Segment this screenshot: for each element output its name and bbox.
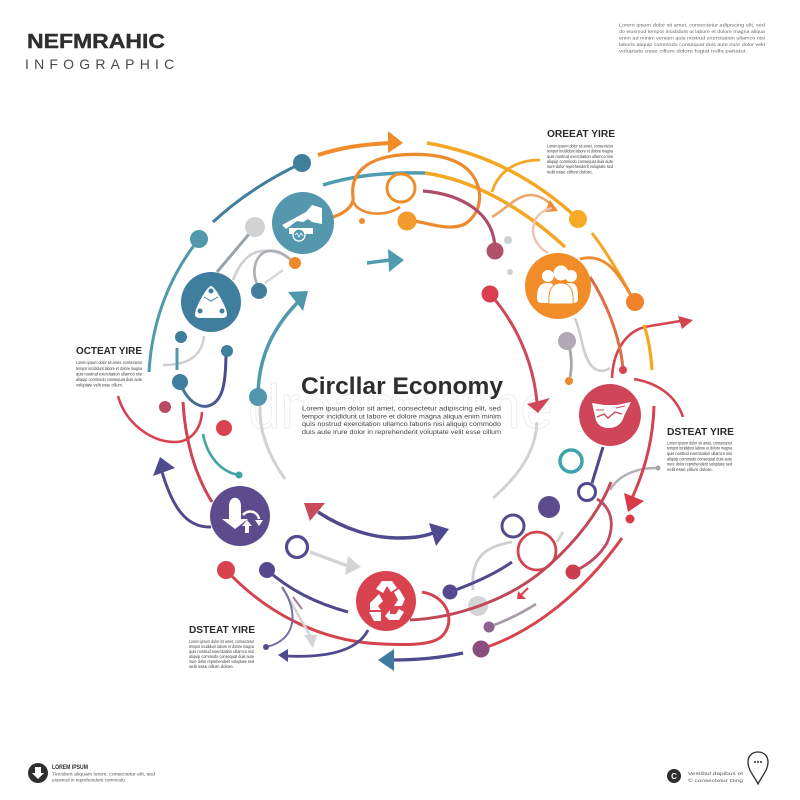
section label: top right: Lorem ipsum dolor sit amet, consectetur bbox=[547, 144, 613, 148]
long red curve with node bbox=[217, 561, 449, 645]
section label: top right: OREEAT YIRE bbox=[547, 128, 615, 140]
header: top right text block: do eiusmod tempor incididunt ut labore et dolore magna aliqua bbox=[619, 29, 765, 35]
red arrow right bbox=[624, 406, 654, 524]
section label: right: aliquip commodo consequat duis aute bbox=[667, 456, 732, 462]
purple dot bbox=[538, 496, 560, 518]
thin purple curve and gray arrow bbox=[263, 587, 317, 650]
purple ring with gray arrow bbox=[286, 536, 361, 575]
left cluster: nodes and gray arc bbox=[163, 331, 233, 406]
gray connector right bbox=[610, 466, 660, 490]
purple arrow from icon bbox=[153, 457, 211, 527]
line: dark teal arc with node bbox=[213, 154, 311, 222]
icon: purple waste arrows bbox=[210, 486, 270, 546]
section label: right: velit esse cillum dolore. bbox=[667, 467, 713, 472]
line: orange loop with node bbox=[333, 154, 480, 230]
line: pale orange with arrow and pink arc bbox=[492, 195, 558, 253]
section label: top right: irure dolor reprehenderit voluptate sed bbox=[547, 164, 613, 169]
center text block: quis nostrud exercitation ullamco laboris nisi aliquip commodo bbox=[302, 421, 502, 428]
section label: right bbox=[667, 426, 734, 472]
footer left: icon and text: Tincidunt aliquam lorem, consectetur elit, sed bbox=[52, 772, 155, 778]
section label: bottom left: irure dolor reprehenderit voluptate sed bbox=[189, 659, 254, 664]
header: brand title: NEFMRAHIC bbox=[27, 31, 165, 53]
section label: left: aliquip commodo consequat duis aute bbox=[76, 377, 142, 382]
line: orange red with small node bbox=[590, 277, 627, 374]
section label: left: OCTEAT YIRE bbox=[76, 345, 142, 357]
main maroon curve from recycle icon bbox=[410, 482, 611, 620]
short teal arrow bbox=[367, 249, 404, 272]
footer right: badge and text: Vestibul dapibus et bbox=[688, 771, 744, 776]
center text block: tempor incididunt ut labore et dolore magna aliqua enim minim bbox=[302, 414, 501, 420]
center text block: duis aute irure dolor in reprehenderit voluptate velit esse cillum bbox=[302, 429, 501, 436]
footer right: badge and text: © consectetur Ding bbox=[688, 777, 744, 783]
section label: bottom left bbox=[189, 624, 255, 669]
red ring bbox=[518, 532, 556, 570]
footer left: icon and text: eiusmod in reprehenderit commodo bbox=[52, 778, 125, 784]
gray node with orange dot bbox=[558, 332, 576, 385]
section label: bottom left: Lorem ipsum dolor sit amet, consectetur bbox=[189, 639, 254, 644]
icon: orange people bbox=[525, 253, 591, 319]
teal curve with small node bbox=[203, 434, 242, 478]
section label: bottom left: aliquip commodo consequat duis aute bbox=[189, 654, 254, 659]
left red arcs and dots bbox=[118, 396, 232, 502]
footer left: icon and text bbox=[28, 763, 155, 784]
section label: right: Lorem ipsum dolor sit amet, consectetur bbox=[667, 440, 732, 446]
teal ring bbox=[560, 450, 582, 472]
header: brand title bbox=[25, 31, 179, 72]
section label: right: irure dolor reprehenderit voluptate sed bbox=[667, 462, 732, 466]
section label: top right: quis nostrud exercitation ullamco nisi bbox=[547, 154, 613, 159]
purple arrow lower bbox=[278, 630, 368, 662]
purple ring with connector bbox=[578, 447, 603, 500]
center heading: Circllar Economy bbox=[301, 373, 503, 400]
purple double-headed arrow bbox=[304, 503, 449, 546]
header: top right text block: enim ad minim veniam quis nostrud exercitation ullamco nisi bbox=[619, 36, 765, 42]
inner red arrow with node bbox=[482, 286, 550, 413]
section label: bottom left: tempor incididunt labore et dolore magna bbox=[189, 644, 254, 649]
icon: teal house and chart bbox=[272, 192, 334, 254]
header: top right text block: Lorem ipsum dolor sit amet, consectetur adipiscing elit, sed bbox=[619, 22, 765, 28]
section label: top right: aliquip commodo consequat duis aute bbox=[547, 159, 613, 164]
footer right: badge and text bbox=[667, 769, 744, 783]
center text block: Lorem ipsum dolor sit amet, consectetur adipiscing elit, sed bbox=[302, 406, 502, 412]
gray curve right bbox=[575, 318, 610, 371]
yellow segment right bbox=[644, 325, 652, 370]
purple node and line bbox=[259, 562, 348, 612]
header: top right text block: laboris aliquip commodo consequat duis aute irure dolor velit bbox=[619, 42, 766, 48]
icon: dark teal triangle bbox=[181, 272, 241, 332]
section label: bottom left: velit esse cillum dolore. bbox=[189, 664, 234, 669]
section label: left bbox=[76, 345, 142, 388]
inner teal arrow with node bbox=[249, 291, 308, 406]
section label: top right: tempor incididunt labore et dolore magna bbox=[547, 148, 613, 154]
section label: left: tempor incididunt labore et dolore magna bbox=[76, 366, 142, 371]
maroon curl with node bbox=[566, 499, 611, 580]
line: top yellow arc with node bbox=[427, 143, 587, 228]
section label: top right: velit esse cillum dolore. bbox=[547, 170, 593, 174]
gray maroon line with node bbox=[484, 604, 536, 632]
icon: location pin bbox=[748, 752, 768, 784]
orange ring bbox=[387, 174, 415, 202]
footer right: badge and text: C bbox=[671, 772, 677, 781]
line: teal left arc with node bbox=[149, 230, 208, 372]
header: top right text block bbox=[619, 22, 766, 54]
arrow: top orange bbox=[318, 131, 403, 155]
section label: right: quis nostrud exercitation ullamco nisi bbox=[667, 451, 732, 456]
footer left: icon and text: LOREM IPSUM bbox=[52, 765, 88, 771]
small orange dot bbox=[359, 218, 365, 224]
gray inner arc left bbox=[260, 406, 285, 479]
line: maroon arc with node bbox=[423, 191, 504, 260]
line: yellow branch bbox=[492, 160, 540, 192]
section label: right: tempor incididunt labore et dolore magna bbox=[667, 446, 732, 450]
small red arrow bbox=[517, 588, 528, 599]
section label: bottom left: quis nostrud exercitation ullamco nisi bbox=[189, 649, 254, 654]
gray arcs with orange and teal nodes bbox=[233, 251, 301, 299]
purple ring bbox=[502, 515, 524, 537]
small gray dots bbox=[504, 236, 513, 275]
icon: red recycle bbox=[356, 571, 416, 631]
outer red line with node bbox=[472, 538, 622, 658]
line: teal to yellow arc bbox=[323, 173, 565, 247]
gray inner arc right bbox=[493, 422, 537, 498]
blue arrow bbox=[378, 649, 463, 671]
gray node with connector bbox=[217, 217, 265, 272]
header: brand title: INFOGRAPHIC bbox=[25, 56, 179, 72]
faint watermark: dreamstime bbox=[248, 373, 553, 442]
gray arc with node bbox=[468, 532, 563, 616]
section label: bottom left: DSTEAT YIRE bbox=[189, 624, 255, 636]
section label: left: Lorem ipsum dolor sit amet, consectetur bbox=[76, 360, 142, 365]
section label: left: voluptate velit esse cillum. bbox=[76, 382, 123, 388]
purple node and line right bbox=[442, 562, 512, 600]
red arrow up right bbox=[612, 316, 693, 378]
header: top right text block: voluptate esse cillum dolore fugiat nulla pariatur. bbox=[619, 48, 747, 54]
orange connectors with node bbox=[580, 233, 644, 311]
red arc right bbox=[634, 379, 683, 417]
section label: top right bbox=[547, 128, 615, 174]
section label: right: DSTEAT YIRE bbox=[667, 426, 734, 438]
icon: red chart shield bbox=[579, 384, 641, 446]
center text block bbox=[302, 406, 502, 436]
section label: left: quis nostrud exercitation ullamco nisi bbox=[76, 372, 142, 376]
